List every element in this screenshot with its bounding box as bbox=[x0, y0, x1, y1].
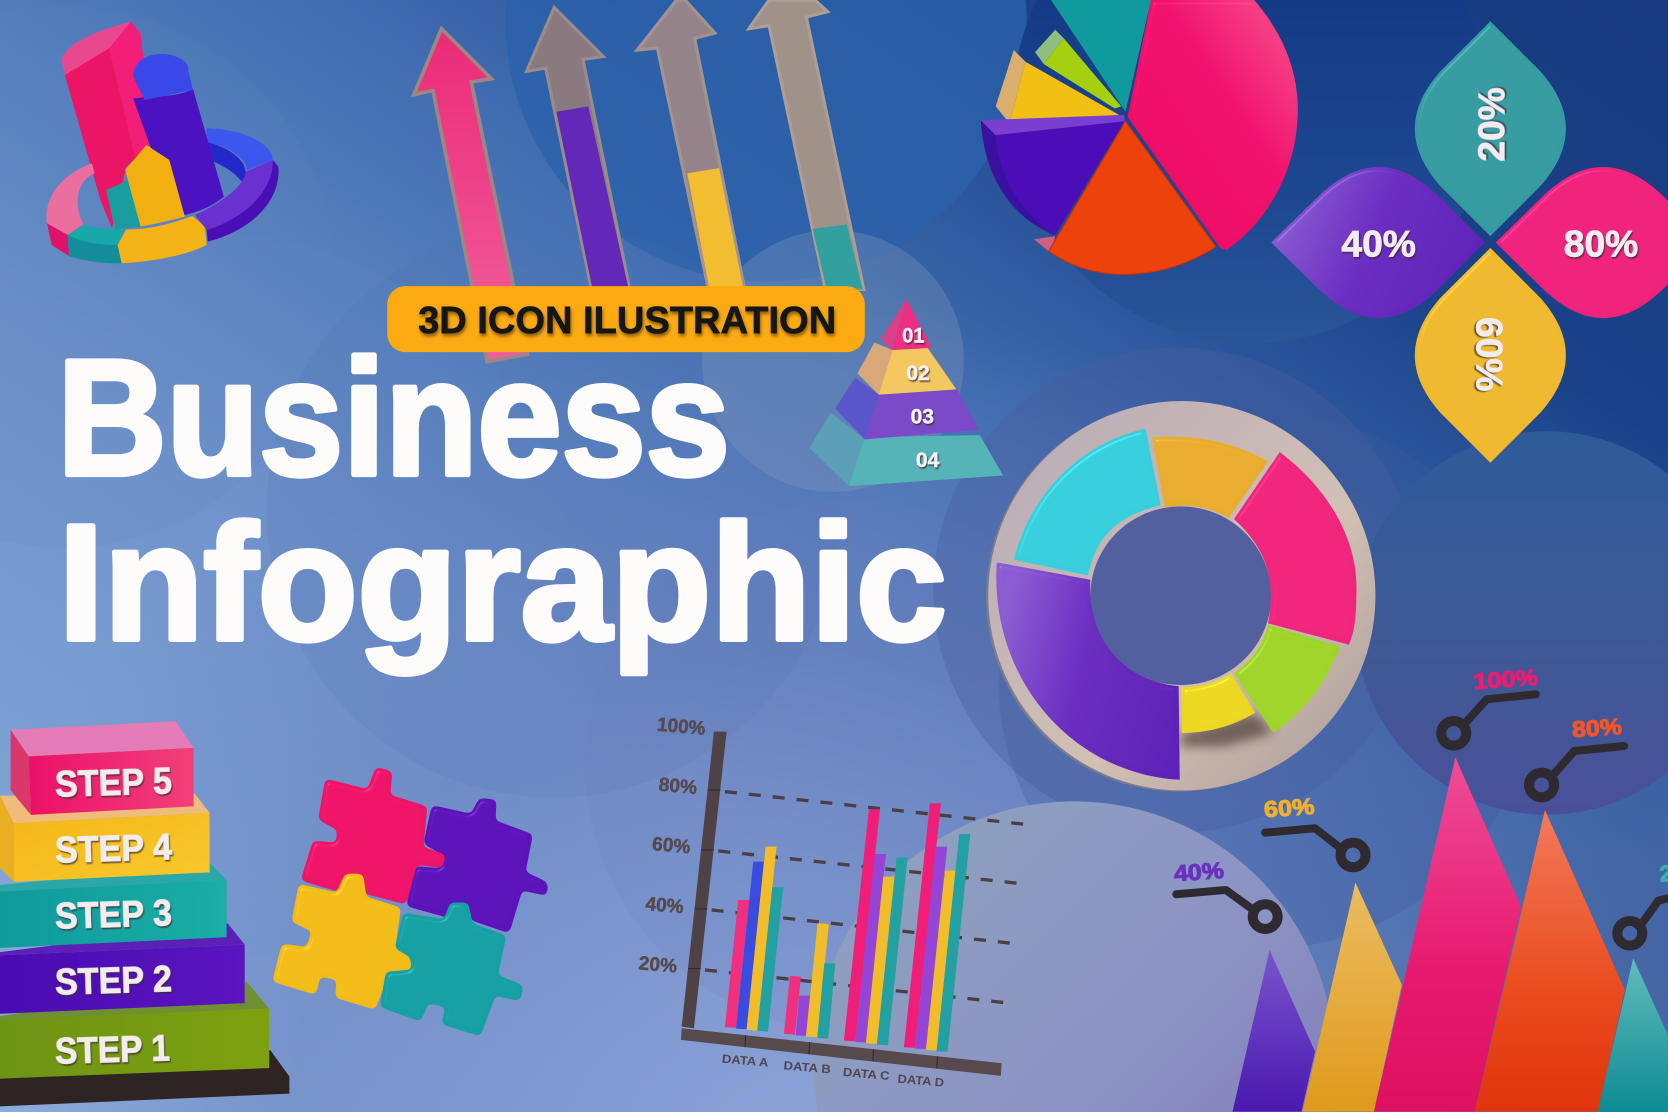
mountain percentage chart bbox=[1173, 664, 1668, 1112]
icon: five step stack bbox=[0, 721, 289, 1106]
step 3: STEP 3 bbox=[54, 891, 173, 937]
petal: 60%: 60% bbox=[1469, 317, 1511, 391]
arrow: pink progress arrow bbox=[414, 29, 528, 362]
slice: purple bbox=[981, 115, 1124, 235]
slice: green bbox=[1035, 30, 1121, 109]
data labels: DATA A bbox=[721, 1052, 769, 1070]
peak labels bbox=[1173, 664, 1668, 887]
petal: 20%: 20% bbox=[1470, 87, 1512, 162]
bars: data D bbox=[904, 803, 970, 1052]
peak labels: 40% bbox=[1173, 857, 1225, 886]
petal: 60% bbox=[1415, 248, 1566, 463]
arrow: teal progress arrow bbox=[749, 0, 864, 289]
axes bbox=[681, 732, 1002, 1076]
peak: 20% bbox=[1598, 958, 1668, 1112]
segment: pink bbox=[1234, 452, 1357, 645]
icon: layered pyramid: 03 bbox=[911, 404, 934, 428]
puzzle piece: pink bbox=[304, 770, 443, 901]
step 3 bbox=[0, 864, 227, 948]
step 4: STEP 4 bbox=[54, 825, 173, 871]
slice: teal bbox=[1051, 0, 1151, 112]
bars: data A bbox=[725, 847, 783, 1032]
peak labels: 100% bbox=[1472, 664, 1539, 694]
data labels bbox=[721, 1052, 945, 1090]
axis labels bbox=[638, 715, 706, 978]
data labels: DATA B bbox=[783, 1058, 832, 1076]
axis labels: 80% bbox=[658, 775, 698, 799]
data labels: DATA D bbox=[897, 1072, 945, 1090]
bars: data C bbox=[844, 809, 908, 1045]
icon: layered pyramid bbox=[810, 299, 1003, 486]
petal: 80%: 80% bbox=[1564, 222, 1638, 264]
peak labels: 60% bbox=[1263, 793, 1315, 822]
icon: 3D pie chart bbox=[981, 0, 1298, 274]
arrow: yellow progress arrow bbox=[637, 0, 745, 289]
peak: 60% bbox=[1303, 883, 1402, 1112]
step 1: STEP 1 bbox=[54, 1026, 170, 1072]
step 5 bbox=[11, 721, 194, 815]
axis labels: 100% bbox=[656, 715, 706, 740]
puzzle piece: purple bbox=[410, 801, 545, 930]
segment: purple bbox=[996, 563, 1180, 780]
puzzle piece: teal bbox=[383, 905, 520, 1033]
title: Infographic bbox=[59, 490, 947, 674]
axis grid lines bbox=[705, 792, 1025, 1003]
arrow: purple progress arrow bbox=[527, 7, 630, 289]
segment: amber bbox=[1152, 437, 1268, 518]
icon: layered pyramid: 02 bbox=[906, 361, 930, 385]
icon: layered pyramid: 04 bbox=[916, 448, 939, 472]
step 1 bbox=[0, 982, 289, 1106]
slice: yellow bbox=[996, 50, 1119, 123]
slice: orange bbox=[1034, 121, 1216, 274]
icon: 3D ring and bar chart bbox=[47, 22, 279, 263]
petal: 40%: 40% bbox=[1341, 222, 1416, 264]
peak: 80% bbox=[1475, 810, 1625, 1112]
icon: layered pyramid: 01 bbox=[902, 324, 925, 348]
petal: 40% bbox=[1271, 167, 1485, 318]
peak: 100% bbox=[1374, 757, 1521, 1112]
axis labels: 40% bbox=[645, 894, 685, 918]
step 5: STEP 5 bbox=[54, 759, 173, 805]
step 4 bbox=[0, 794, 210, 882]
icon: four puzzle pieces bbox=[276, 770, 545, 1033]
badge: 3D icon illustration: 3D ICON ILUSTRATION bbox=[418, 299, 836, 342]
bar chart bbox=[638, 715, 1025, 1090]
peak labels: 80% bbox=[1571, 713, 1623, 742]
badge: 3D icon illustration bbox=[387, 286, 865, 352]
segment: green bbox=[1234, 624, 1340, 733]
step 2 bbox=[0, 923, 245, 1014]
bars: data B bbox=[784, 923, 835, 1039]
slice: pink bbox=[1128, 0, 1298, 250]
title: Business bbox=[57, 325, 730, 509]
segment: cyan bbox=[1014, 429, 1161, 576]
pointers bbox=[1176, 694, 1668, 946]
puzzle piece: yellow bbox=[276, 877, 413, 1006]
peak: 40% bbox=[1233, 950, 1315, 1112]
data labels: DATA C bbox=[842, 1065, 890, 1083]
petal: 80% bbox=[1496, 167, 1668, 318]
axis labels: 20% bbox=[638, 953, 678, 978]
step 2: STEP 2 bbox=[54, 957, 173, 1003]
title bbox=[57, 325, 947, 674]
axis labels: 60% bbox=[651, 834, 691, 858]
icon: donut chart on plate bbox=[986, 401, 1375, 791]
petal: 20% bbox=[1415, 21, 1566, 236]
icon: four petal percentage chart bbox=[1271, 21, 1668, 463]
segment: yellow bbox=[1182, 673, 1255, 733]
